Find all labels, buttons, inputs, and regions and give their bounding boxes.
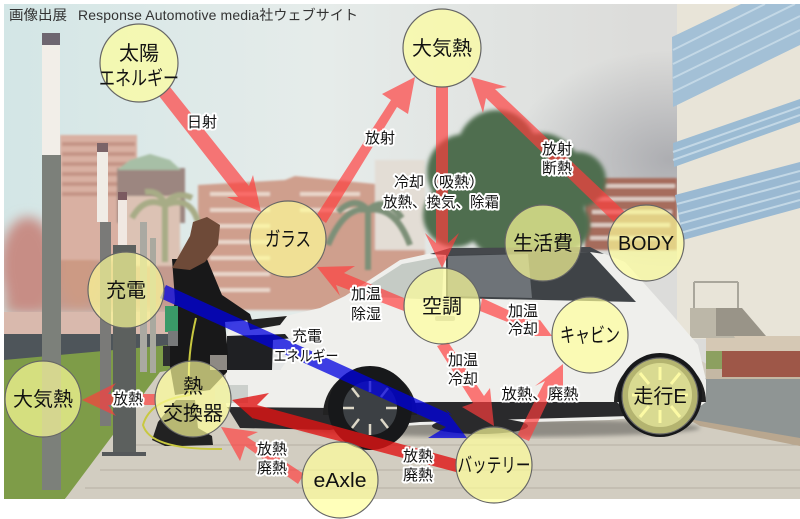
roof bbox=[430, 247, 604, 255]
node: atmospheric heat left bbox=[5, 361, 81, 437]
label: charging energy bbox=[274, 328, 338, 365]
ground shadow bbox=[300, 419, 700, 437]
label: radiation: 放射 bbox=[365, 130, 395, 147]
far fence and wall bbox=[4, 312, 168, 334]
node: living cost: 生活費 bbox=[513, 232, 573, 255]
hood shadow and grille bbox=[247, 316, 287, 330]
node: battery bbox=[456, 427, 532, 503]
arrow: glass radiation to atmosphere bbox=[316, 77, 415, 223]
node: body: BODY bbox=[618, 233, 674, 255]
arrow: battery to heat exchanger bbox=[232, 393, 456, 472]
label: heat release to atmosphere: 放熱 bbox=[113, 391, 143, 408]
label: heat release from battery: 放熱 bbox=[403, 448, 433, 465]
arrow: solar radiation to glass bbox=[159, 87, 261, 212]
label: radiation and insulation bbox=[542, 141, 572, 177]
label: heat release from eAxle: 廃熱 bbox=[257, 460, 287, 477]
node: charging bbox=[88, 252, 164, 328]
label: cooling and ventilation bbox=[383, 174, 499, 211]
arrow: air conditioning to cabin bbox=[480, 298, 552, 336]
windshield bbox=[367, 256, 444, 300]
node: charging: 充電 bbox=[106, 279, 146, 302]
car bbox=[215, 247, 706, 450]
node: air conditioning: 空調 bbox=[422, 295, 462, 318]
label: heat release from eAxle bbox=[257, 441, 287, 477]
wall charger bbox=[163, 306, 178, 366]
label: heating and cooling to cabin bbox=[508, 303, 538, 338]
label: radiation and insulation: 放射 bbox=[542, 141, 572, 158]
node: glass bbox=[250, 201, 326, 277]
pink background trees bbox=[4, 210, 183, 312]
node: atmospheric heat top bbox=[403, 9, 481, 87]
gray cloud at right of sky bbox=[544, 69, 677, 220]
label: radiation and insulation: 断熱 bbox=[542, 160, 572, 177]
side windows bbox=[446, 252, 636, 302]
arrow: eAxle to heat exchanger bbox=[221, 427, 304, 484]
plate bbox=[226, 385, 248, 403]
node: glass: ガラス bbox=[265, 228, 311, 251]
sky bbox=[4, 4, 706, 370]
front wheel arch bbox=[323, 379, 417, 415]
node: cabin: キャビン bbox=[560, 324, 620, 347]
right building bbox=[677, 4, 800, 339]
steps bbox=[690, 308, 735, 338]
title: image source: Response Automotive media社ウェブサイト bbox=[78, 7, 358, 23]
arrow: atmosphere cooling to air conditioning bbox=[425, 87, 459, 268]
node: atmospheric heat left: 大気熱 bbox=[13, 388, 73, 411]
node: cabin bbox=[552, 297, 628, 373]
node: living cost bbox=[505, 205, 581, 281]
label: cooling and ventilation: 放熱、換気、除霜 bbox=[383, 194, 499, 211]
label: charging energy: 充電 bbox=[292, 328, 322, 345]
tan ground and red bench bbox=[706, 336, 800, 352]
charging post bbox=[102, 245, 146, 456]
blue louvres bbox=[672, 4, 800, 240]
label: heat release and waste heat to cabin: 放熱、廃熱 bbox=[502, 386, 578, 403]
node: heat exchanger: 交換器 bbox=[163, 402, 223, 425]
rear wheel bbox=[618, 353, 702, 437]
label: heat release from battery bbox=[403, 448, 433, 484]
arrow: air conditioning to glass bbox=[317, 266, 404, 311]
road and curb bbox=[690, 378, 800, 442]
rear wheel arch bbox=[614, 372, 706, 402]
label: heating and dehumidifying: 除湿 bbox=[351, 306, 381, 323]
label: cooling and ventilation: 冷却（吸熱） bbox=[394, 174, 484, 191]
grass bbox=[4, 345, 170, 499]
label: heating and cooling to cabin: 加温 bbox=[508, 303, 538, 320]
label: heating and cooling to battery: 加温 bbox=[448, 352, 478, 369]
node: eAxle bbox=[302, 442, 378, 518]
arrow: battery to cabin bbox=[517, 364, 563, 441]
label: solar radiation: 日射 bbox=[187, 114, 217, 131]
label: heating and dehumidifying bbox=[351, 286, 381, 323]
label: heating and dehumidifying: 加温 bbox=[351, 286, 381, 303]
label: heating and cooling to cabin: 冷却 bbox=[508, 321, 538, 338]
arrow: air conditioning to battery bbox=[437, 342, 494, 426]
node: solar energy bbox=[99, 24, 179, 102]
label: heating and cooling to battery: 冷却 bbox=[448, 371, 478, 388]
node: atmospheric heat top: 大気熱 bbox=[412, 37, 472, 60]
front wheel bbox=[328, 366, 412, 450]
node: driving energy: 走行E bbox=[633, 385, 687, 408]
node: solar energy: 太陽 bbox=[119, 42, 159, 65]
label: heating and cooling to battery bbox=[448, 352, 478, 388]
large green tree bbox=[423, 110, 606, 260]
label: heat release from eAxle: 放熱 bbox=[257, 441, 287, 458]
arrow: charging energy to battery bbox=[160, 285, 467, 438]
label: heat release from battery: 廃熱 bbox=[403, 467, 433, 484]
arrow: heat exchanger to atmosphere bbox=[82, 383, 155, 416]
palm trees bbox=[132, 192, 410, 270]
node: heat exchanger: 熱 bbox=[183, 375, 203, 398]
title: image source: 画像出展 bbox=[9, 7, 67, 23]
arrow: body radiation to atmosphere bbox=[471, 77, 625, 222]
pavement bbox=[65, 360, 800, 499]
node: air conditioning bbox=[404, 268, 480, 344]
node: heat exchanger bbox=[155, 361, 231, 437]
node: body bbox=[608, 205, 684, 281]
lower sill and bumper bbox=[227, 402, 630, 430]
door handle bbox=[435, 316, 455, 321]
node: solar energy: エネルギー bbox=[99, 67, 179, 90]
node: battery: バッテリー bbox=[458, 455, 530, 477]
woman bbox=[143, 217, 252, 449]
lamp posts bbox=[42, 33, 156, 490]
label: charging energy: エネルギー bbox=[274, 348, 338, 365]
node: eAxle: eAxle bbox=[314, 470, 366, 492]
distant buildings bbox=[60, 135, 677, 310]
node: driving energy bbox=[622, 358, 698, 434]
